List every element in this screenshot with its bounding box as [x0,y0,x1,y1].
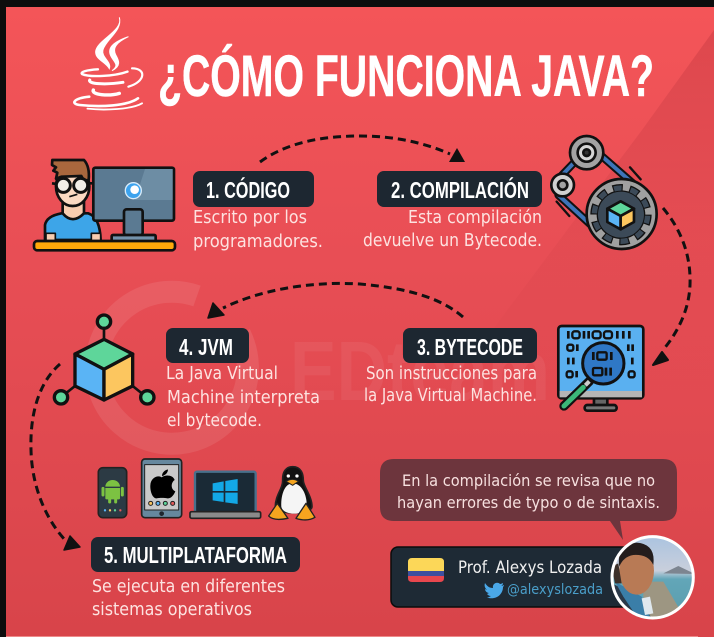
text: step 5 description [92,577,285,620]
label: step 5 [91,537,300,572]
text: step 2 description [363,208,542,251]
text: step 3 description: la Java Virtual Machine. [364,386,537,406]
text: step 4 description: Machine interpreta [167,388,320,408]
text: step 5 description: sistemas operativos [92,600,252,620]
icon: windows laptop [190,472,261,518]
text: step 2 description: devuelve un Bytecode. [363,231,542,251]
text: step 1 description: programadores. [193,232,323,252]
label: step 2: 2. COMPILACIÓN [391,176,529,203]
callout: speech bubble: hayan errores de typo o de sintaxis. [397,493,660,512]
arrow: code to compilation [260,136,465,162]
text: step 1 description: Escrito por los [193,208,307,228]
icon: programmer at computer [34,160,175,250]
label: step 1 [193,171,314,207]
icon: linux penguin [269,467,315,520]
label: step 2 [377,171,542,207]
icon: gear and pulleys [551,136,657,249]
watermark logo [96,292,248,444]
icons: operating systems [98,459,315,520]
label: step 3: 3. BYTECODE [417,334,523,360]
icon: jvm cube [54,315,154,404]
text: step 3 description: Son instrucciones para [366,364,537,384]
author card: Prof. Alexys Lozada [458,558,602,577]
text: step 2 description: Esta compilación [408,208,542,228]
callout: speech bubble [380,459,677,540]
callout: speech bubble: En la compilación se revisa que no [402,471,655,490]
text: step 4 description [166,364,320,431]
text: step 3 description [364,364,537,406]
icon: android phone [98,468,127,518]
arrow: bytecode to jvm [208,283,463,318]
text: step 5 description: Se ejecuta en diferentes [92,577,285,597]
text: step 1 description [193,208,323,252]
author card: @alexyslozada [507,582,603,598]
icon: bytecode monitor with magnifier [558,326,643,411]
icon: apple tablet [142,459,182,518]
author photo [610,535,697,620]
text: step 4 description: el bytecode. [167,411,262,431]
icon: java logo [74,17,142,110]
watermark text: EDteam [290,324,550,418]
icon: twitter bird [485,583,504,598]
label: step 4: 4. JVM [179,334,233,360]
label: step 5: 5. MULTIPLATAFORMA [104,542,287,568]
arrow: compilation to bytecode [653,208,690,365]
text: step 4 description: La Java Virtual [166,364,278,384]
author card [391,547,641,607]
arrow: jvm to multiplatform [31,364,80,550]
icon: colombia flag [408,558,444,582]
label: step 4 [166,328,249,363]
label: step 1: 1. CÓDIGO [206,176,290,203]
label: step 3 [403,328,537,363]
